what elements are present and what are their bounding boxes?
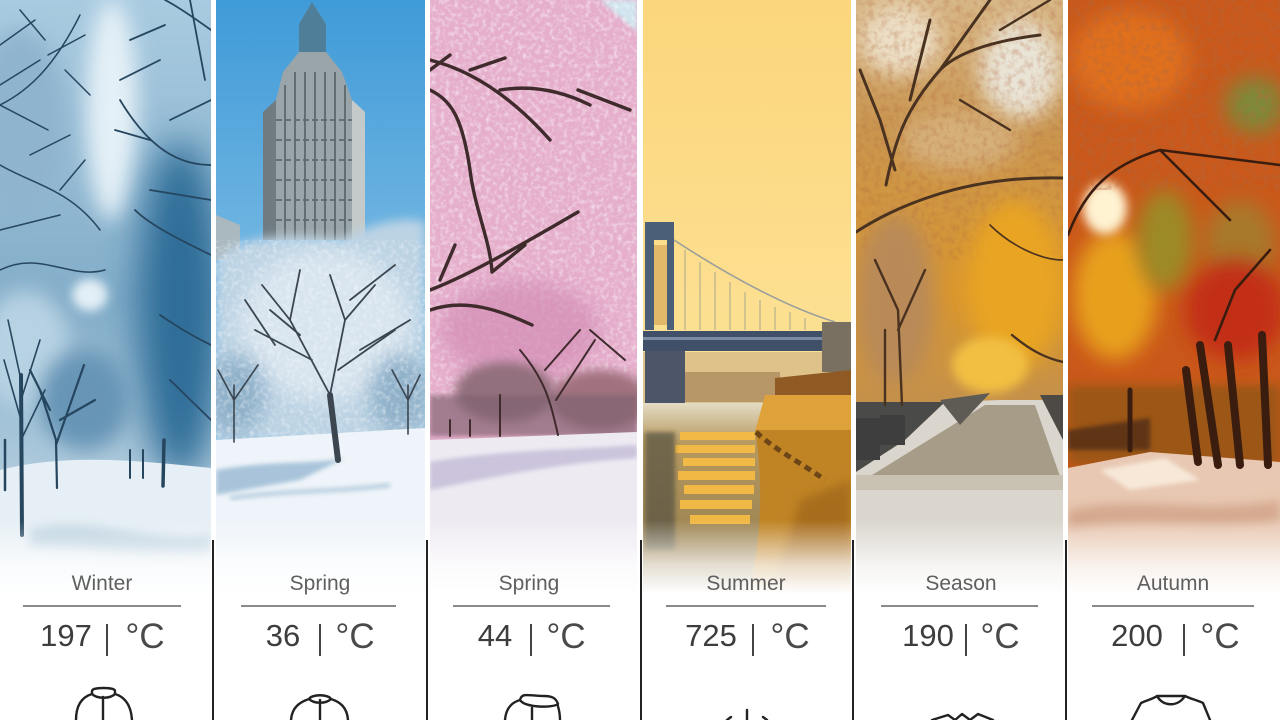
icon: bridge <box>643 222 851 403</box>
column: winter caption <box>23 572 181 720</box>
column: spring caption two: 44 <box>478 618 512 653</box>
column: spring caption one: °C <box>335 617 375 656</box>
column: autumn caption: Autumn <box>1137 572 1209 595</box>
panel: red autumn photo <box>1068 0 1280 600</box>
column: summer caption: Summer <box>706 572 786 595</box>
panel: winter photo <box>0 0 211 562</box>
column: spring caption one: 36 <box>266 618 300 653</box>
column: winter caption: 197 <box>40 618 92 653</box>
icon: spring jacket <box>291 695 348 720</box>
column: spring caption two: °C <box>546 617 586 656</box>
column: winter caption: °C <box>125 617 165 656</box>
panel: cherry blossom photo <box>430 0 637 556</box>
column: summer caption: 725 <box>685 618 737 653</box>
column: autumn caption: 200 <box>1111 618 1163 653</box>
panel: summer bridge photo <box>643 0 851 600</box>
column: spring caption one <box>241 572 396 720</box>
column: late season caption: Season <box>925 572 997 595</box>
column dividers <box>213 540 1066 720</box>
icon: skyscraper <box>263 2 365 240</box>
column: autumn caption: °C <box>1200 617 1240 656</box>
column: summer caption <box>666 572 826 720</box>
column: spring caption one: Spring <box>290 572 350 595</box>
icon: summer garment <box>727 710 767 720</box>
column: late season caption <box>881 572 1038 720</box>
icon: winter jacket <box>76 688 132 720</box>
column: spring caption two <box>453 572 610 720</box>
panel: spring city photo <box>216 0 425 552</box>
panel: autumn avenue photo <box>855 0 1063 600</box>
photo fade to white <box>0 520 1280 602</box>
column: late season caption: °C <box>980 617 1020 656</box>
column: summer caption: °C <box>770 617 810 656</box>
icon: shirt <box>932 714 993 720</box>
column: late season caption: 190 <box>902 618 954 653</box>
icon: sweater <box>1132 696 1210 720</box>
column: spring caption two: Spring <box>499 572 559 595</box>
column: winter caption: Winter <box>72 572 132 595</box>
icon: hooded jacket <box>505 695 560 720</box>
column: autumn caption <box>1092 572 1254 720</box>
